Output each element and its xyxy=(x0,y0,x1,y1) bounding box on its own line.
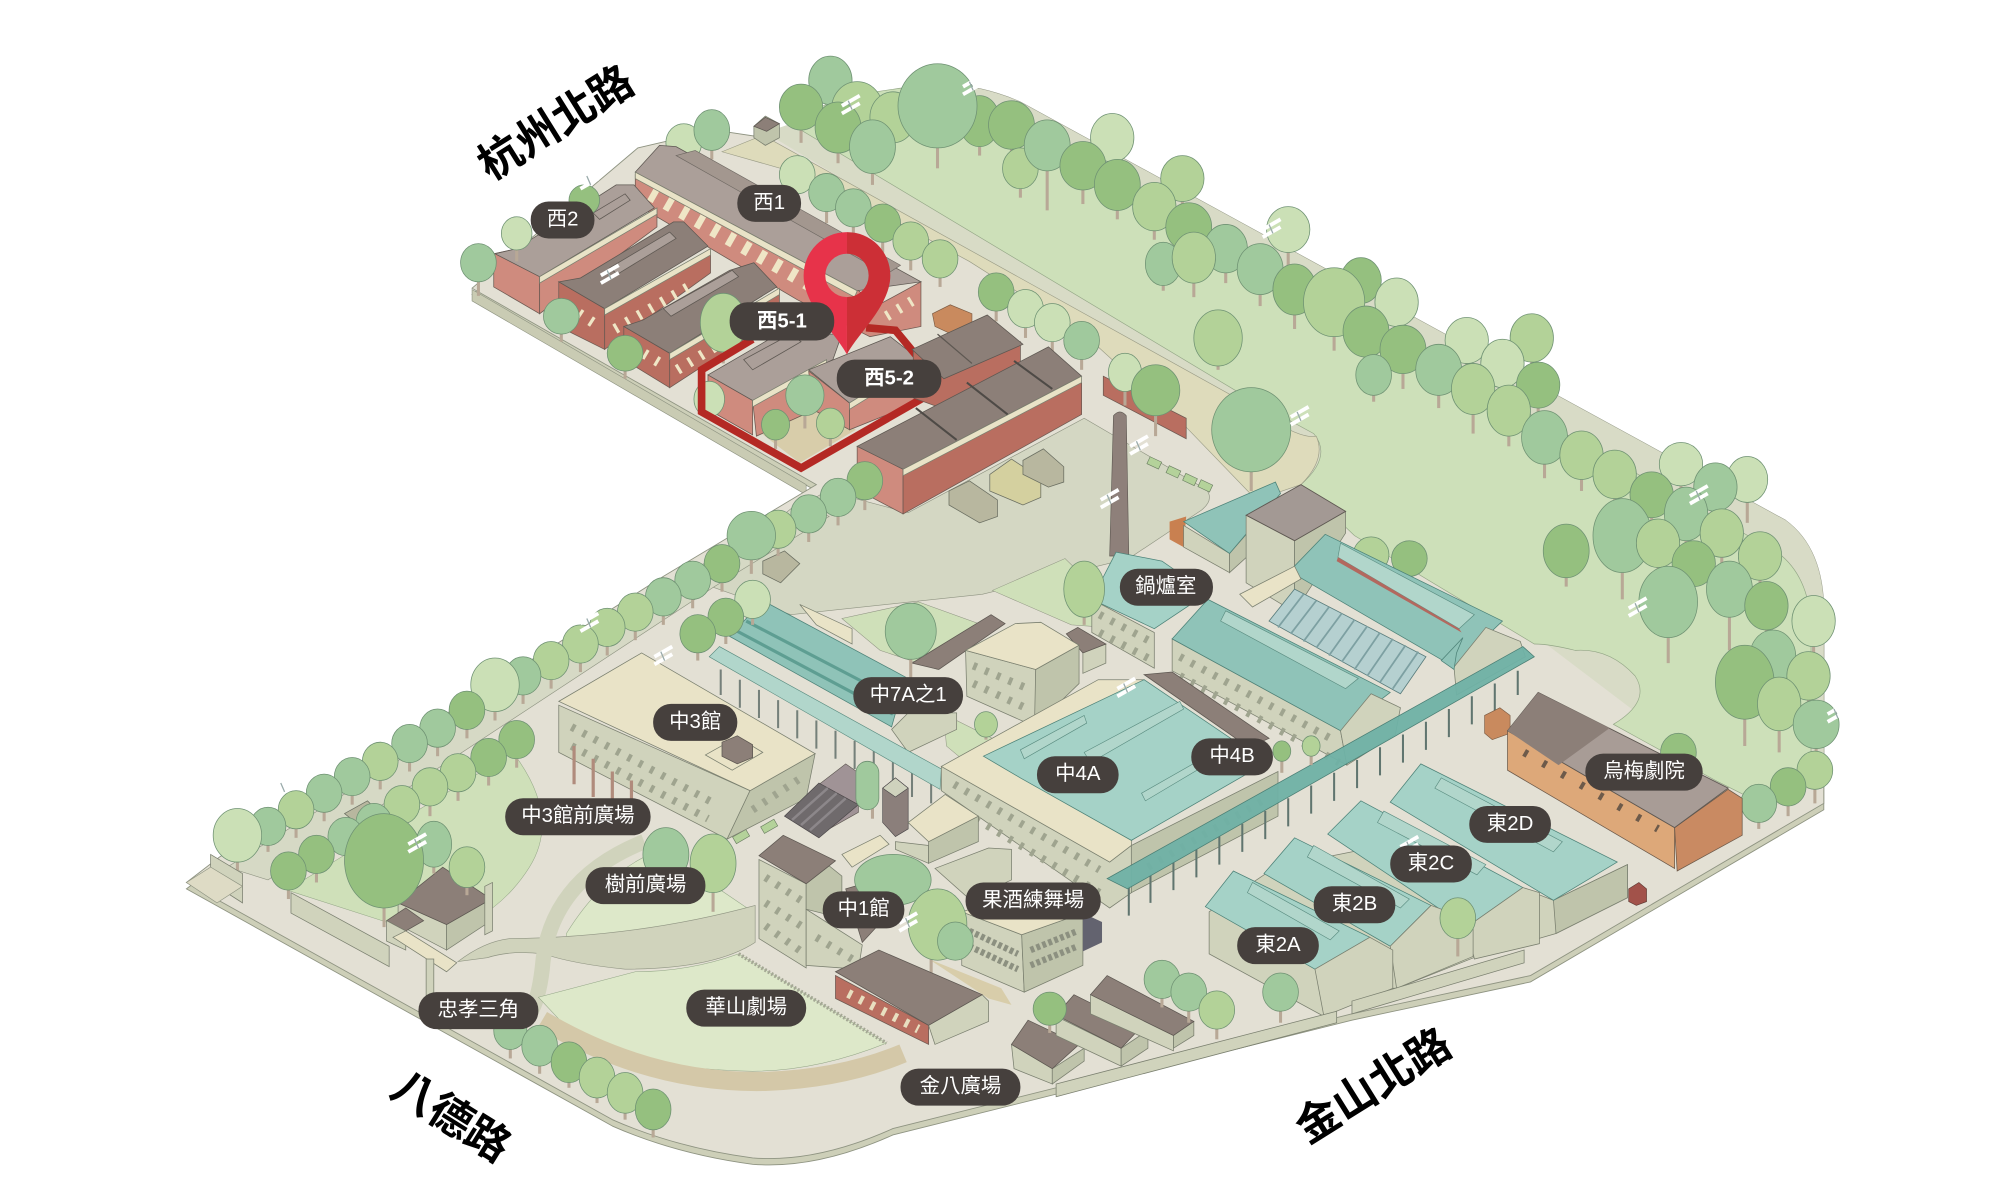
label: 西2 xyxy=(531,201,594,238)
label: 東2C xyxy=(1390,845,1472,882)
orange booth xyxy=(1485,708,1510,740)
labels: building names xyxy=(418,185,1703,1106)
courtyard connector xyxy=(1240,566,1301,607)
trees: road line beside west wing xyxy=(666,110,1099,370)
label: 中4B: 中4B xyxy=(1209,744,1255,767)
label: 東2A: 東2A xyxy=(1255,933,1301,956)
label: 果酒練舞場 xyxy=(966,882,1101,919)
label: 中3館: 中3館 xyxy=(669,710,721,733)
lawn: strip beside south wing xyxy=(227,504,829,880)
red boundary of 西5 xyxy=(702,328,921,468)
trees: west wing xyxy=(461,185,746,379)
label: 中1館: 中1館 xyxy=(837,897,890,920)
trees: courtyard 西5 xyxy=(694,375,844,449)
label: 東2D: 東2D xyxy=(1487,812,1533,835)
trees: bottom row xyxy=(494,1011,671,1138)
kiosk xyxy=(754,116,779,145)
label: 中3館前廣場 xyxy=(505,798,651,835)
label: 鍋爐室: 鍋爐室 xyxy=(1135,575,1196,598)
label: 中7A之1: 中7A之1 xyxy=(870,683,947,706)
label: 金八廣場 xyxy=(901,1069,1020,1106)
label: 東2D xyxy=(1469,806,1551,843)
lawn: north park xyxy=(788,87,1811,806)
gate xyxy=(393,931,457,997)
path: sand strip along the road xyxy=(722,135,1319,500)
trees: south wing diagonal row xyxy=(213,462,883,899)
mailbox xyxy=(1629,882,1647,905)
building: large warehouse xyxy=(857,347,1082,514)
building: cream office xyxy=(966,622,1079,727)
label: 中1館 xyxy=(823,891,904,928)
road name: 杭州北路: 杭州北路 xyxy=(470,57,642,190)
building: 西5-1 xyxy=(708,334,842,436)
tree: courtyard xyxy=(885,561,1105,740)
road name: 八德路: 八德路 xyxy=(383,1062,518,1172)
building: north hall xyxy=(1289,534,1525,695)
label: 中7A之1 xyxy=(853,677,963,714)
colonnade: main canopy xyxy=(1107,647,1534,916)
building: red house xyxy=(835,950,989,1044)
chimney xyxy=(1110,412,1129,556)
buildings: south sheds xyxy=(1011,976,1194,1084)
building: 中1館 xyxy=(759,835,908,969)
label: 東2C: 東2C xyxy=(1408,851,1454,874)
building: glass hall xyxy=(1269,589,1426,694)
building: stairs xyxy=(784,764,858,838)
trees: back row north park xyxy=(779,56,1839,829)
label: 西1 xyxy=(737,185,801,222)
building: 烏梅劇院 xyxy=(1508,692,1742,871)
trees: 中1 grove xyxy=(855,854,973,988)
green bins xyxy=(733,457,1213,844)
building: 鍋爐室 xyxy=(1092,552,1208,668)
vehicles xyxy=(345,449,1064,829)
label: 中3館前廣場: 中3館前廣場 xyxy=(521,804,635,827)
label: 西5-1 xyxy=(730,302,834,340)
building: 西3 xyxy=(559,222,711,349)
label: 烏梅劇院 xyxy=(1585,754,1703,791)
plaza: parking lot xyxy=(682,418,1209,615)
utility markers xyxy=(274,77,1845,931)
trees: by 中4B xyxy=(1273,736,1320,773)
label: 樹前廣場 xyxy=(586,867,705,904)
selected area: courtyard 西5 xyxy=(756,403,856,463)
building: small garden house xyxy=(387,867,492,950)
label: 中3館 xyxy=(653,704,737,741)
building: brown sheds xyxy=(912,615,1106,673)
label: 忠孝三角: 忠孝三角 xyxy=(438,998,519,1021)
trees: south yard xyxy=(1033,960,1235,1039)
path: curved walkway xyxy=(458,905,755,969)
label: 西1: 西1 xyxy=(753,192,785,214)
ground: site base xyxy=(186,85,1824,1165)
building: 中7A xyxy=(730,601,957,752)
path: rail track xyxy=(739,954,887,1043)
label: 果酒練舞場: 果酒練舞場 xyxy=(982,888,1084,911)
colonnade: 中7A walkway xyxy=(709,647,941,803)
path: ring walkway xyxy=(529,842,644,1014)
tree: slim xyxy=(856,761,879,819)
fence walls along 金山北路 xyxy=(1056,950,1524,1097)
building: 果酒練舞場 xyxy=(929,893,1102,1005)
label: 華山劇場: 華山劇場 xyxy=(705,995,787,1018)
building: 西1 xyxy=(635,145,921,337)
label: 西5-2 xyxy=(837,360,941,398)
trees: by the brick wall xyxy=(1108,353,1291,491)
label: 西2: 西2 xyxy=(547,208,578,230)
label: 樹前廣場: 樹前廣場 xyxy=(605,873,686,896)
label: 鍋爐室 xyxy=(1120,569,1213,606)
map pin xyxy=(804,232,890,355)
building: 中3館 xyxy=(559,653,815,839)
lawn: south lawn xyxy=(538,954,887,1071)
lawn: central lawn xyxy=(566,857,753,937)
label: 華山劇場 xyxy=(686,990,806,1027)
buildings: 東2 group xyxy=(1205,764,1627,1016)
label: 忠孝三角 xyxy=(418,992,538,1029)
sand arc wall xyxy=(542,1020,903,1082)
trees: plaza xyxy=(643,828,736,912)
label: 中4B xyxy=(1191,738,1273,775)
label: 東2B xyxy=(1314,886,1395,923)
label: 東2B: 東2B xyxy=(1332,892,1377,915)
building: 西2 xyxy=(494,185,657,314)
building: square tower xyxy=(1246,485,1346,612)
building: teal annex xyxy=(1170,482,1281,573)
label: 中4A: 中4A xyxy=(1055,762,1101,785)
building: 西5-2 xyxy=(809,337,920,430)
trees: left garden xyxy=(345,814,485,927)
building: upper warehouse xyxy=(912,315,1023,408)
building: low annex xyxy=(895,794,1011,899)
trees: 東2 yard xyxy=(1263,898,1476,1023)
label: 西5-1: 西5-1 xyxy=(757,310,807,332)
building: 中4 xyxy=(941,672,1278,908)
label: 金八廣場: 金八廣場 xyxy=(920,1075,1001,1098)
label: 烏梅劇院: 烏梅劇院 xyxy=(1603,760,1685,783)
lawns: central courtyard xyxy=(842,559,1107,765)
road name: 金山北路: 金山北路 xyxy=(1287,1020,1460,1153)
lawn: left garden xyxy=(287,752,542,937)
label: 東2A xyxy=(1237,927,1319,964)
label: 中4A xyxy=(1037,756,1119,793)
building: south hall xyxy=(1172,599,1400,765)
left gate wall xyxy=(186,854,389,967)
small orange hut xyxy=(932,305,972,334)
building: 西4 xyxy=(624,263,779,388)
building: lift tower xyxy=(883,778,908,837)
label: 西5-2: 西5-2 xyxy=(864,368,914,390)
brick wall by the chimney xyxy=(1103,376,1186,439)
